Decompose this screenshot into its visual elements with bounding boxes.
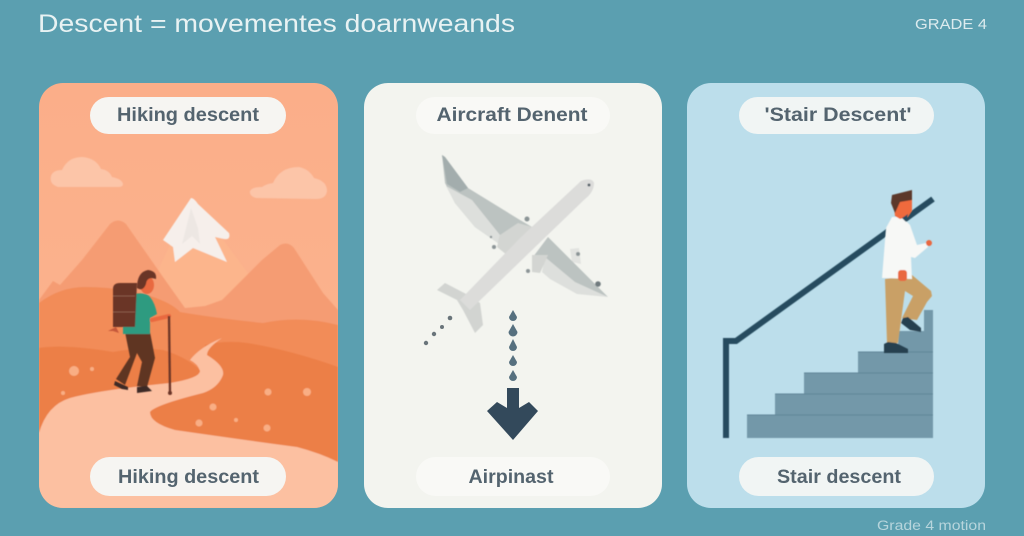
winding path	[39, 338, 338, 508]
label: stair top	[739, 97, 934, 134]
icon: hiker	[108, 270, 172, 395]
arrow: downward	[487, 388, 538, 440]
footer note: Grade 4 motion	[877, 518, 986, 533]
label: hiking top	[90, 97, 286, 134]
label: hiking bottom: Hiking descent	[118, 467, 260, 488]
icon: handrail	[726, 199, 933, 438]
label: aircraft top	[416, 97, 610, 134]
label: stair bottom	[739, 457, 934, 496]
label: hiking bottom	[90, 457, 286, 496]
icon: airplane	[437, 155, 608, 333]
panel: stair descent	[687, 83, 985, 508]
mountains	[39, 220, 338, 325]
icon: snowy peak	[163, 198, 229, 262]
icon: clouds	[51, 157, 327, 199]
label: hiking top: Hiking descent	[117, 105, 260, 126]
icon: person on stairs	[882, 190, 932, 353]
grade label: GRADE 4	[915, 17, 987, 33]
center mountain	[130, 198, 290, 330]
icon: trail dots	[424, 316, 452, 345]
icon: droplets	[508, 310, 518, 381]
label: aircraft bottom: Airpinast	[468, 467, 554, 488]
title: Descent = movementes doarnweands	[38, 10, 515, 38]
panel: aircraft descent	[364, 83, 662, 508]
panel: hiking descent	[39, 83, 338, 508]
ground specks	[61, 366, 311, 432]
label: aircraft bottom	[416, 457, 610, 496]
label: stair top: 'Stair Descent'	[764, 105, 912, 126]
icon: staircase	[747, 310, 933, 438]
label: aircraft top: Aircraft Denent	[436, 105, 588, 126]
label: stair bottom: Stair descent	[777, 467, 902, 488]
